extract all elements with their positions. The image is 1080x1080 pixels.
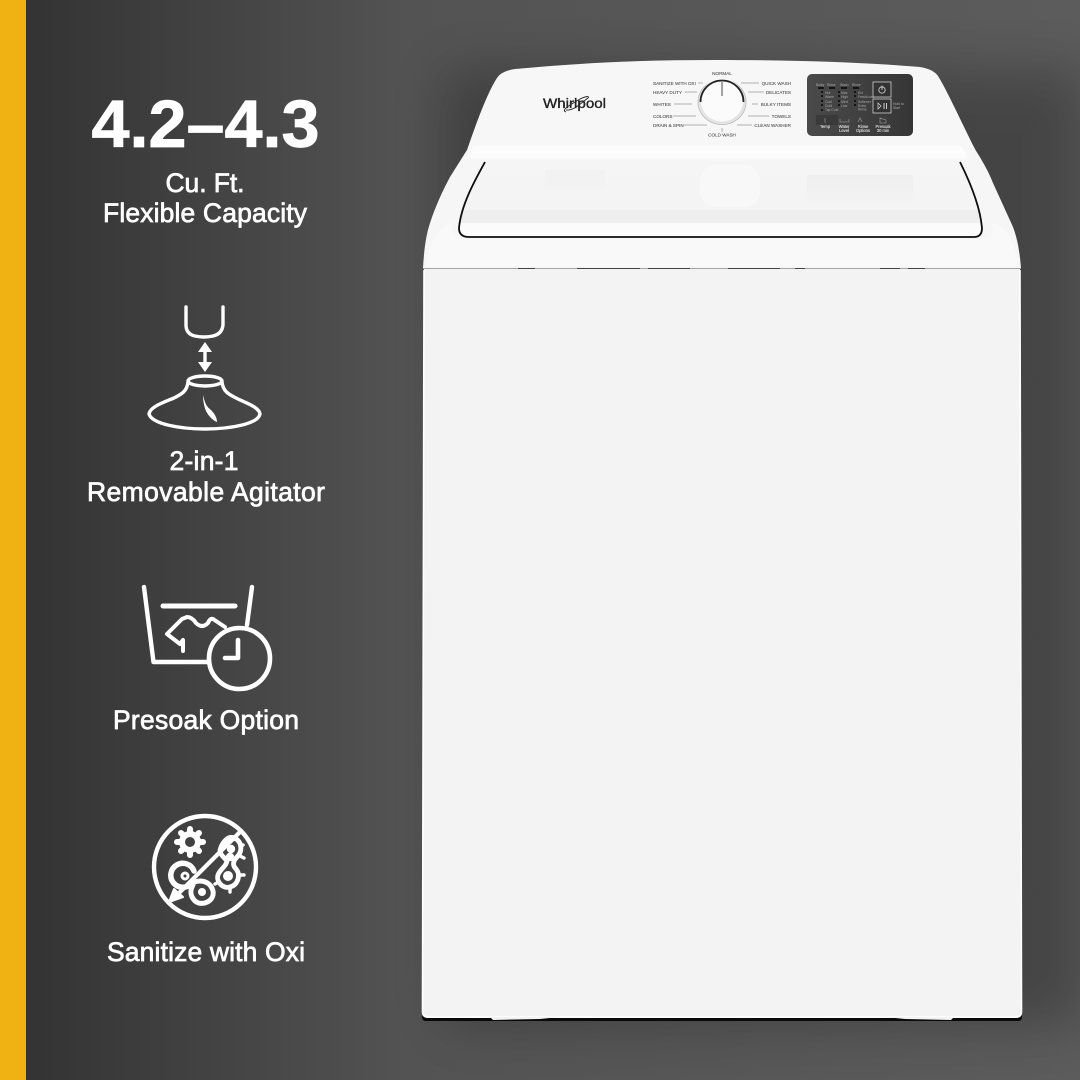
control panel: Softener bbox=[858, 100, 872, 104]
control panel: Level bbox=[839, 128, 849, 133]
lid outline bbox=[459, 162, 982, 237]
icon: agitator bbox=[149, 307, 260, 429]
cycle labels centre: COLD WASH bbox=[708, 132, 736, 138]
presoak label: Presoak Option bbox=[113, 705, 299, 735]
start pause button bbox=[873, 99, 904, 113]
control panel: Med bbox=[841, 100, 848, 104]
cycle labels left: SANITIZE WITH OXI bbox=[653, 81, 696, 86]
agitator label bbox=[87, 446, 325, 507]
control panel: Tap Cold bbox=[825, 108, 838, 112]
cabinet feet bbox=[490, 1017, 954, 1020]
control panel bbox=[807, 74, 913, 136]
cycle labels right: DELICATES bbox=[766, 90, 791, 95]
agitator label: Removable Agitator bbox=[87, 477, 325, 507]
selector knob bbox=[698, 78, 746, 124]
control panel: FreshLoad bbox=[858, 95, 874, 99]
feature: capacity bbox=[92, 87, 320, 228]
cycle labels centre bbox=[708, 71, 736, 138]
control panel: Cold bbox=[825, 104, 832, 108]
agitator label: 2-in-1 bbox=[170, 446, 238, 476]
control panel: Hot bbox=[825, 91, 830, 95]
control panel: Temp bbox=[820, 124, 831, 129]
control console bbox=[467, 60, 976, 160]
control panel: Bulky bbox=[816, 83, 825, 87]
control panel: Warm bbox=[825, 95, 834, 99]
control panel: Rinse bbox=[858, 108, 867, 112]
cycle labels right: BULKY ITEMS bbox=[761, 102, 791, 107]
control panel: Cool bbox=[825, 100, 832, 104]
washer top deck bbox=[423, 150, 1021, 268]
deck shoulder shading bbox=[426, 222, 1018, 266]
cycle labels left: HEAVY DUTY bbox=[653, 90, 682, 95]
control panel: Rinse bbox=[858, 124, 869, 129]
control panel: Presoak bbox=[875, 124, 891, 129]
cycle labels centre: NORMAL bbox=[712, 71, 732, 76]
feature: presoak bbox=[113, 587, 299, 735]
lid glass bbox=[459, 161, 982, 237]
cycle labels right: QUICK WASH bbox=[762, 81, 791, 86]
start pause button: Hold to bbox=[893, 102, 904, 106]
whirlpool logo: Whirlpool bbox=[543, 96, 606, 111]
control panel: Water bbox=[839, 124, 850, 129]
cycle labels left: COLORS bbox=[653, 114, 672, 119]
control panel: 30 min bbox=[877, 128, 890, 133]
control panel: Extra bbox=[858, 104, 866, 108]
washer bbox=[422, 60, 1022, 1021]
cycle labels left: WHITES bbox=[653, 102, 671, 107]
control panel: Low bbox=[841, 104, 848, 108]
cycle labels right bbox=[737, 81, 792, 128]
deck seam bbox=[423, 268, 1021, 270]
control panel: Rinse bbox=[827, 83, 836, 87]
sanitize label: Sanitize with Oxi bbox=[107, 937, 305, 967]
cycle labels right: CLEAN WASHER bbox=[754, 123, 792, 128]
washer cabinet body bbox=[422, 268, 1022, 1018]
capacity label bbox=[103, 168, 308, 228]
start pause button: Start bbox=[893, 106, 900, 110]
capacity label: Cu. Ft. bbox=[166, 168, 244, 198]
lid reflections bbox=[807, 175, 913, 207]
feature: removable agitator bbox=[87, 307, 325, 507]
washer shadow bbox=[422, 1012, 1022, 1021]
capacity label: Flexible Capacity bbox=[103, 198, 308, 228]
yellow side bar bbox=[0, 0, 26, 1080]
console lower band bbox=[470, 146, 968, 158]
control panel: Max bbox=[841, 91, 848, 95]
cycle labels left: DRAIN & SPIN bbox=[653, 123, 684, 128]
cycle labels left bbox=[653, 81, 707, 128]
control panel: Ext bbox=[858, 91, 863, 95]
icon: wash tub with clock bbox=[144, 587, 270, 689]
lid bbox=[459, 161, 982, 237]
icon: no germs bbox=[154, 816, 256, 918]
power button bbox=[873, 82, 891, 97]
capacity figure: 4.2–4.3 bbox=[92, 87, 320, 162]
feature: sanitize bbox=[107, 816, 305, 967]
control panel: Rinse bbox=[852, 83, 861, 87]
control panel: High bbox=[841, 95, 848, 99]
control panel: Options bbox=[856, 128, 870, 133]
cycle labels right: TOWELS bbox=[772, 114, 791, 119]
control panel: Wash bbox=[840, 83, 849, 87]
